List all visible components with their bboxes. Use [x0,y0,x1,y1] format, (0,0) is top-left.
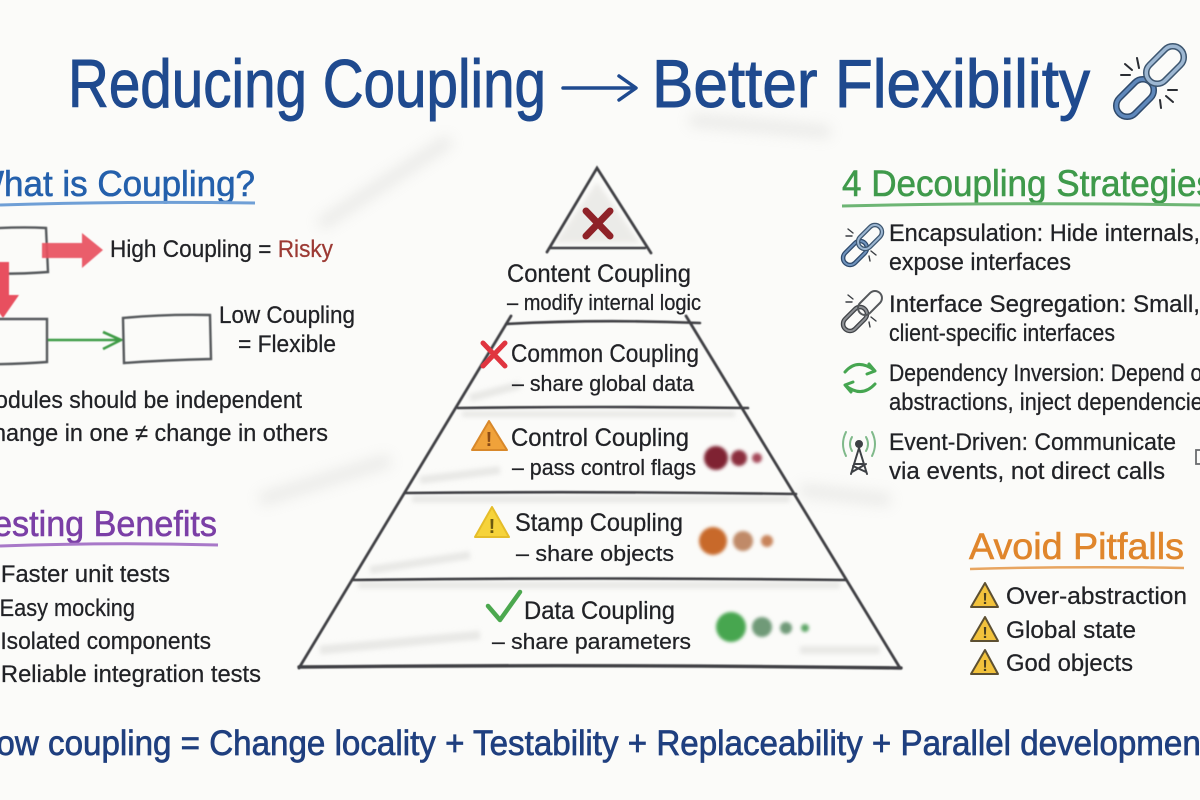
label: high coupling: High Coupling = Risky [110,236,333,263]
icon: clipped box at edge [1196,450,1200,464]
level: common coupling: – share global data [512,371,695,396]
icon: broadcast antenna [843,432,875,474]
panel: decoupling strategies [840,163,1200,485]
level: control coupling: ! [486,429,492,451]
heading: avoid pitfalls: Avoid Pitfalls [969,526,1184,567]
level: control coupling: – pass control flags [512,455,696,480]
strategy: interface segregation: client-specific interfaces [889,320,1115,347]
strategy: event-driven: via events, not direct calls [889,458,1165,485]
chart: coupling pyramid [299,168,901,668]
level: data coupling: – share parameters [492,629,691,654]
strategy: event-driven [889,429,1176,485]
level: common coupling: Common Coupling [511,340,699,368]
level: content coupling: – modify internal logic [507,290,701,315]
icon: green cycle arrows [845,364,875,392]
icon: chain encapsulation [840,222,885,268]
pyramid shading [320,182,880,650]
level: control coupling: Control Coupling [511,424,689,452]
level: stamp coupling: – share objects [516,541,674,566]
icon: broken chain link [1112,42,1188,121]
panel: testing benefits [0,503,261,688]
level: stamp coupling [475,507,773,566]
pitfall: god objects: ! [982,658,988,675]
pitfall: god objects: God objects [1006,650,1133,677]
level: stamp coupling: ! [489,516,495,538]
title: Better Flexibility [652,46,1090,122]
strategy: dependency inversion [889,360,1200,416]
strategy: encapsulation [889,220,1200,276]
low coupling diagram [0,315,211,364]
panel: what is coupling [0,163,355,447]
strategy: interface segregation: Interface Segregation: Small, [889,291,1200,318]
label: low coupling: Low Coupling [219,302,355,329]
title: Reducing Coupling [68,46,546,122]
level: control coupling [472,421,762,480]
strategy: event-driven: Event-Driven: Communicate [889,429,1176,456]
level: content coupling [507,260,701,315]
pitfall: global state: ! [982,625,988,642]
strategy: interface segregation [889,291,1200,347]
level: common coupling [483,340,699,396]
strategy: encapsulation: expose interfaces [889,249,1071,276]
text: modules independent [0,387,328,447]
pitfall: over-abstraction: ! [982,591,988,608]
icon: chain segregation [840,288,885,334]
high coupling diagram [0,227,103,318]
list: benefits [0,561,261,688]
icon: red cross top [586,211,610,236]
title [68,46,1090,122]
level: data coupling [488,592,809,654]
pyramid outline [299,168,901,668]
panel: avoid pitfalls [969,526,1187,677]
level: stamp coupling: Stamp Coupling [515,509,683,537]
label: low coupling: = Flexible [238,331,336,358]
pitfall: over-abstraction: Over-abstraction [1006,583,1187,610]
level: data coupling: Data Coupling [524,597,675,625]
strategy: encapsulation: Encapsulation: Hide internals, [889,220,1200,247]
label: low coupling [219,302,355,358]
pitfall: global state: Global state [1006,617,1136,644]
level: content coupling: Content Coupling [507,260,691,288]
